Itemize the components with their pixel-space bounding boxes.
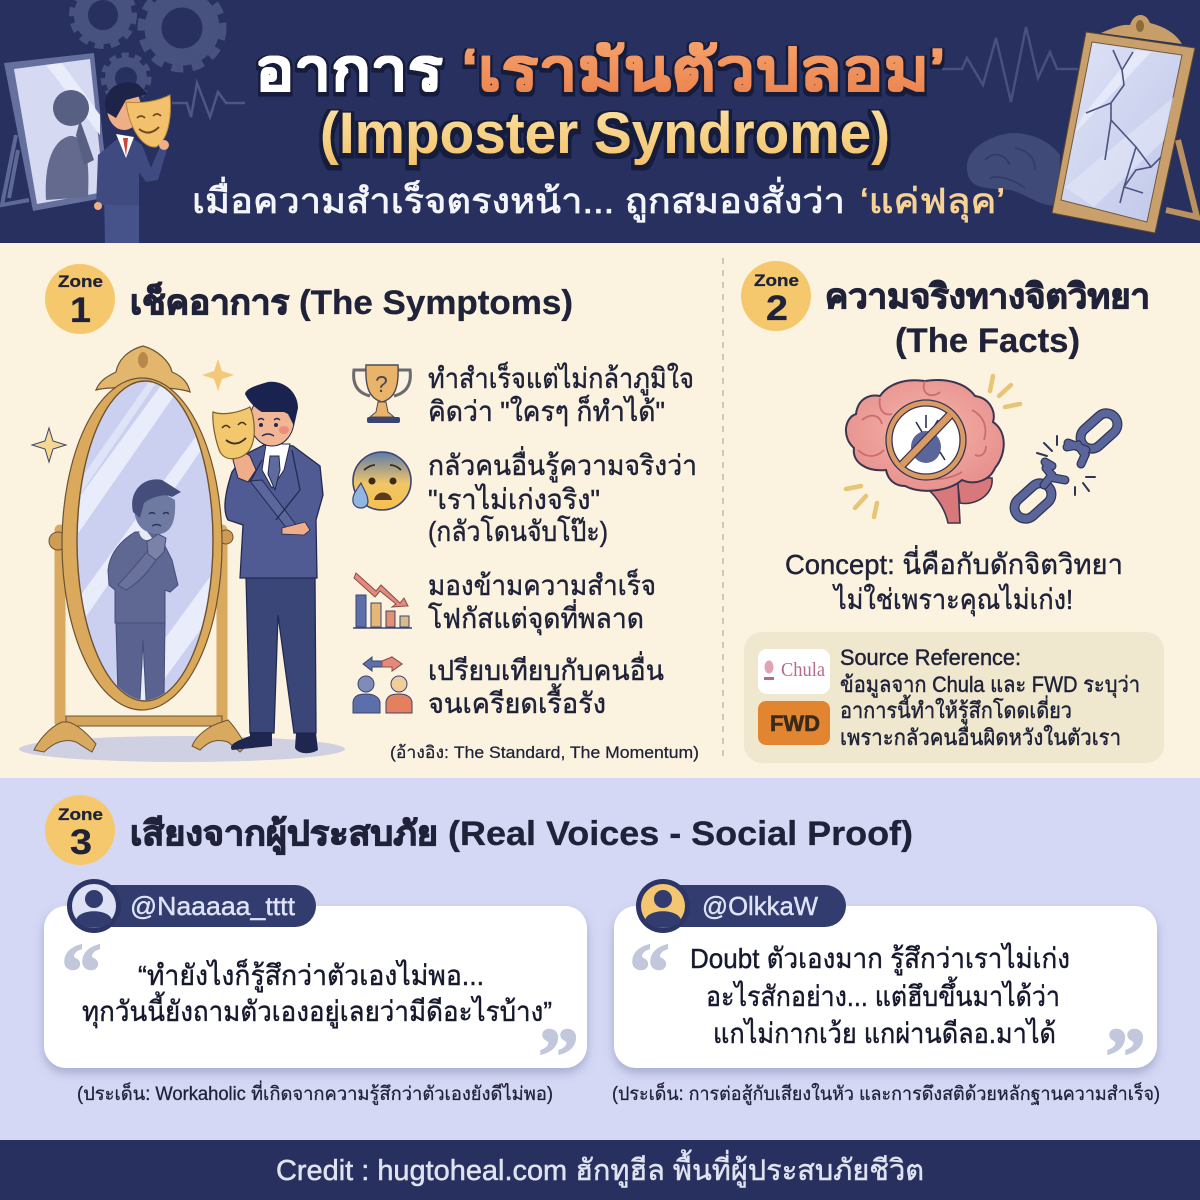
- symptom 4 text: เปรียบเทียบกับคนอื่น: [428, 651, 664, 686]
- user tag 2: @OlkkaW: [702, 891, 818, 921]
- source text: ข้อมูลจาก Chula และ FWD ระบุว่า: [840, 672, 1140, 698]
- footer credit bar: [0, 1140, 1200, 1200]
- source reference box: [744, 632, 1164, 763]
- zone 2 badge: 2: [766, 289, 788, 328]
- logo: FWD: [758, 701, 830, 745]
- symptom 2 text: กลัวคนอื่นรู้ความจริงว่า: [428, 446, 697, 483]
- quote card 1: [44, 879, 587, 1102]
- icon: close quote mark: ”: [538, 1011, 579, 1102]
- concept statement: ไม่ใช่เพราะคุณไม่เก่ง!: [832, 583, 1073, 617]
- icon: right pulse line: [942, 27, 1078, 102]
- zone 1 heading: เช็คอาการ (The Symptoms): [130, 281, 573, 322]
- caption 1: (ประเด็น: Workaholic ที่เกิดจากความรู้สึกว่าตัวเองยังดีไม่พอ): [77, 1080, 553, 1105]
- logo: Chula: [758, 649, 830, 694]
- icon: left pulse line: [172, 83, 245, 117]
- zone 1 badge: 1: [70, 291, 91, 330]
- quote text 2: แกไม่กากเว้ย แกผ่านดีลอ.มาได้: [713, 1018, 1056, 1049]
- zone 1 badge: [45, 264, 115, 334]
- illustration: mirror with man and mask: [19, 346, 345, 762]
- icon: falling bar chart: [353, 573, 412, 628]
- symptom 4 text: [428, 651, 664, 719]
- user tag 1: @Naaaaa_tttt: [130, 891, 296, 921]
- zone 3 badge: [45, 795, 115, 865]
- illustration: man holding mask before mirror: [2, 53, 170, 243]
- concept statement: Concept: นี่คือกับดักจิตวิทยา: [785, 545, 1123, 580]
- source text: เพราะกลัวคนอื่นผิดหวังในตัวเรา: [840, 722, 1121, 750]
- zone 3 badge: Zone: [58, 805, 103, 824]
- caption 2: (ประเด็น: การต่อสู้กับเสียงในหัว และการดึงสติด้วยหลักฐานความสำเร็จ): [612, 1081, 1160, 1105]
- panel: zone 2 facts: [741, 261, 1164, 763]
- panel: zone 3 real voices: [0, 778, 1200, 1140]
- title line 1: ‘เรามันตัวปลอม’: [462, 38, 945, 103]
- zone 1 badge: Zone: [58, 272, 103, 291]
- zone 3 heading: เสียงจากผู้ประสบภัย (Real Voices - Social Proof): [130, 815, 913, 855]
- symptom 4 text: จนเครียดเรื้อรัง: [428, 683, 606, 719]
- illustration: cracked mirror: [1052, 15, 1197, 233]
- user tag 2: [636, 879, 846, 933]
- zone 3 badge: 3: [70, 823, 92, 862]
- zone 2 badge: [741, 261, 811, 331]
- symptom 3 text: [428, 568, 656, 636]
- user tag 1: [67, 879, 316, 933]
- symptom 1 text: [428, 361, 694, 427]
- quote text 1: “ทำยังไงก็รู้สึกว่าตัวเองไม่พอ...: [138, 958, 484, 993]
- symptom 2 text: [428, 446, 697, 547]
- icon: background gears: [72, 0, 223, 101]
- quote text 2: [690, 943, 1070, 1049]
- icon: brain silhouette: [967, 133, 1060, 205]
- illustration: brain with no bug sign: [846, 376, 1020, 523]
- title line 2: (Imposter Syndrome): [320, 101, 890, 166]
- quote text 1: ทุกวันนี้ยังถามตัวเองอยู่เลยว่ามีดีอะไรบ้าง”: [82, 991, 552, 1029]
- symptom 3 text: มองข้ามความสำเร็จ: [428, 568, 656, 601]
- title line 1: [255, 38, 945, 103]
- icon: trophy with question mark: ?: [375, 371, 388, 397]
- source text: อาการนี้ทำให้รู้สึกโดดเดี่ยว: [840, 695, 1072, 724]
- panel: zone 1 symptoms: [19, 264, 699, 762]
- zone 2 heading: ความจริงทางจิตวิทยา: [825, 278, 1150, 316]
- symptom 3 text: โฟกัสแต่จุดที่พลาด: [428, 599, 644, 636]
- citation: (อ้างอิง: The Standard, The Momentum): [390, 743, 699, 762]
- icon: open quote mark 2: “: [629, 926, 670, 1017]
- title line 1: อาการ: [255, 38, 443, 103]
- icon: anxious face: [353, 452, 411, 510]
- subtitle: ‘แค่ฟลุค’: [860, 182, 1005, 222]
- symptom 2 text: (กลัวโดนจับโป๊ะ): [428, 515, 608, 547]
- icon: open quote mark: “: [61, 926, 102, 1017]
- source text: Source Reference:: [840, 645, 1021, 670]
- source text: [840, 645, 1140, 750]
- icon: close quote mark 2: ”: [1105, 1011, 1146, 1102]
- icon: comparing two people: [353, 657, 412, 713]
- quote text 2: อะไรสักอย่าง... แต่ฮึบขึ้นมาได้ว่า: [706, 976, 1060, 1012]
- symptom 1 text: คิดว่า "ใครๆ ก็ทำได้": [428, 394, 665, 427]
- zone 2 badge: Zone: [754, 271, 799, 290]
- icon: broken chain: [1010, 409, 1122, 523]
- symptom 1 text: ทำสำเร็จแต่ไม่กล้าภูมิใจ: [428, 361, 694, 396]
- subtitle: [192, 177, 1005, 222]
- panel: zone 1 and zone 2 background: [0, 243, 1200, 778]
- symptom 2 text: "เราไม่เก่งจริง": [428, 484, 600, 515]
- logo: Chula: Chula: [781, 659, 825, 681]
- zone 2 heading: [825, 278, 1150, 360]
- footer credit bar: Credit : hugtoheal.com ฮักทูฮีล พื้นที่ผู้ประสบภัยชีวิต: [276, 1149, 924, 1188]
- subtitle: เมื่อความสำเร็จตรงหน้า... ถูกสมองสั่งว่า: [192, 177, 845, 222]
- zone 2 heading: (The Facts): [895, 322, 1080, 360]
- quote text 1: [82, 958, 552, 1029]
- header banner: [0, 0, 1200, 243]
- logo: FWD: FWD: [770, 711, 820, 736]
- concept statement: [785, 545, 1123, 617]
- icon: trophy with question mark: [354, 365, 410, 423]
- quote card 2: [614, 879, 1157, 1102]
- quote text 2: Doubt ตัวเองมาก รู้สึกว่าเราไม่เก่ง: [690, 943, 1070, 976]
